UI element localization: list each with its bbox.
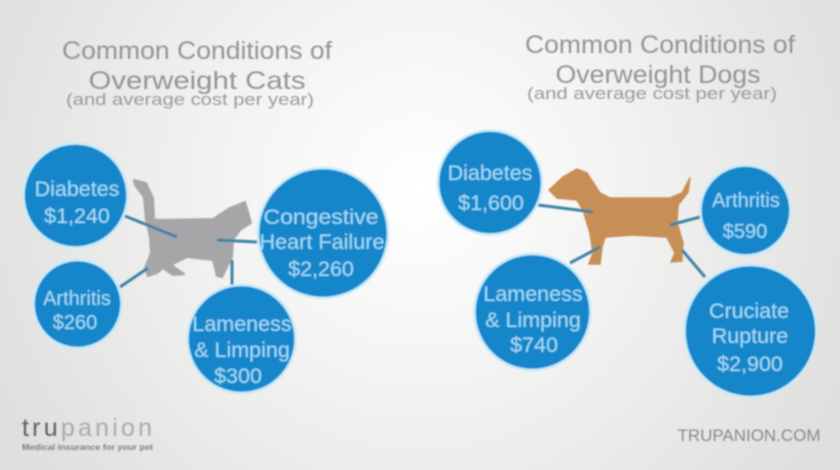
callout: cat lameness and limping: $300: [214, 364, 262, 388]
callout: cat lameness and limping: & Limping: [194, 338, 290, 362]
panel: overweight dogs: [438, 31, 820, 445]
callout: dog lameness and limping: [474, 254, 590, 370]
callout: cat diabetes: $1,240: [44, 204, 110, 228]
callout: dog lameness and limping: Lameness: [483, 282, 583, 306]
logo: trupanion: Medical insurance for your pet: [22, 442, 153, 452]
callout: dog cruciate rupture: [684, 265, 816, 397]
logo: trupanion: trupanion: [22, 414, 152, 442]
callout: cat congestive heart failure: [258, 168, 388, 298]
heading: dogs: Common Conditions of: [525, 31, 795, 59]
heading: cats: [62, 37, 332, 109]
panel: overweight cats: [22, 37, 388, 452]
website label: TRUPANION.COM: [678, 426, 820, 445]
callout: cat congestive heart failure: $2,260: [288, 257, 354, 281]
callout: dog arthritis: Arthritis: [712, 190, 780, 212]
icon: dog silhouette: [549, 169, 690, 264]
callout: cat congestive heart failure: Congestive: [264, 205, 378, 229]
callout: cat diabetes: Diabetes: [35, 177, 119, 201]
callout: dog cruciate rupture: $2,900: [717, 352, 783, 376]
heading: cats: Common Conditions of: [62, 37, 332, 65]
heading: dogs: Overweight Dogs: [556, 61, 760, 89]
callout: dog diabetes: Diabetes: [448, 161, 532, 185]
callout: cat arthritis: $260: [53, 312, 97, 334]
callout: dog cruciate rupture: Rupture: [712, 324, 788, 348]
callout: cat arthritis: [34, 260, 122, 348]
callout: dog cruciate rupture: Cruciate: [709, 299, 789, 323]
callout: dog arthritis: [700, 166, 790, 256]
heading: cats: (and average cost per year): [66, 90, 314, 109]
connector lines: cat: [120, 216, 257, 287]
connector lines: dog: [538, 205, 705, 277]
callout: cat arthritis: Arthritis: [43, 288, 111, 310]
callout: dog lameness and limping: $740: [510, 333, 558, 357]
callout: cat lameness and limping: [188, 285, 296, 393]
callout: dog diabetes: $1,600: [458, 191, 524, 215]
heading: dogs: [525, 31, 795, 103]
callout: dog arthritis: $590: [723, 221, 767, 243]
callout: cat lameness and limping: Lameness: [192, 312, 292, 336]
icon: cat silhouette: [134, 180, 251, 277]
callout: cat congestive heart failure: Heart Failure: [260, 230, 384, 254]
callout: cat diabetes: [24, 144, 128, 248]
heading: dogs: (and average cost per year): [527, 84, 777, 103]
callout: dog lameness and limping: & Limping: [485, 308, 581, 332]
callout: dog diabetes: [438, 130, 542, 234]
heading: cats: Overweight Cats: [88, 67, 306, 95]
